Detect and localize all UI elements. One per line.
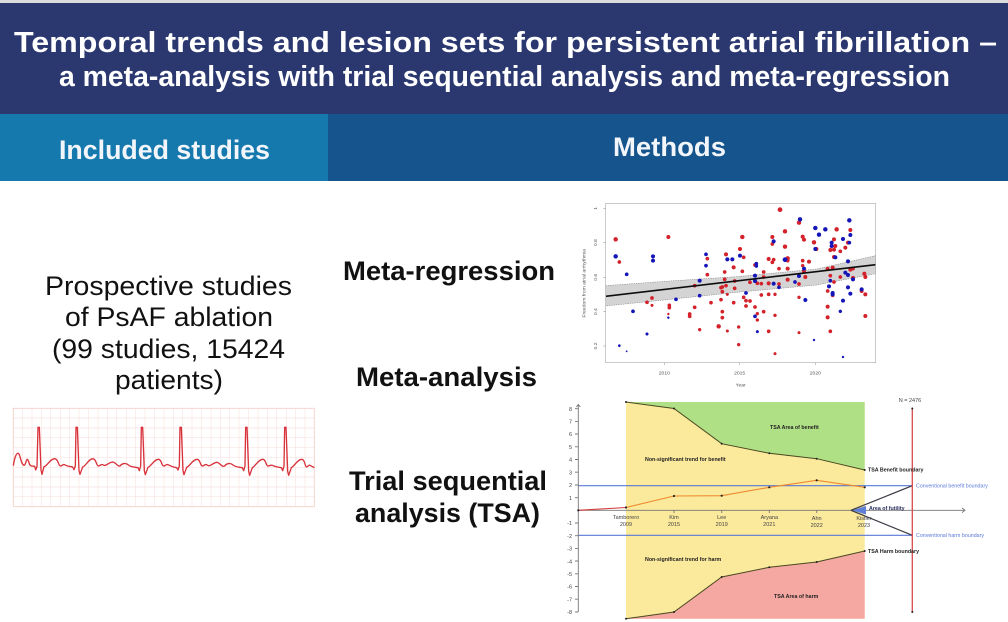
conventional boundary labels: [916, 484, 988, 539]
heading: included studies: Included studies: [59, 135, 270, 165]
axes labels: [582, 207, 821, 388]
study labels: Ahn: [812, 516, 822, 522]
y-axis tick labels: 1: [569, 496, 572, 502]
region labels: TSA Benefit boundary: [868, 468, 923, 474]
conventional boundaries: [578, 486, 912, 535]
study labels: 2019: [716, 522, 728, 528]
study labels: Kistler: [856, 516, 872, 522]
heading: included studies: [0, 114, 328, 181]
y-axis tick labels: 2: [569, 483, 572, 489]
y-axis tick labels: [567, 407, 572, 616]
region labels: Non-significant trend for harm: [645, 557, 722, 563]
N label: N = 2476: [899, 398, 921, 404]
axes labels: 0.6: [593, 274, 599, 281]
axes labels: Freedom from atrial arrhythmia: [582, 249, 588, 318]
text: included studies description: [45, 271, 292, 395]
y-axis tick labels: 8: [569, 407, 572, 413]
icon: ECG strip: [13, 408, 314, 507]
study labels: Kim: [669, 515, 679, 521]
y-axis tick labels: -5: [567, 572, 572, 578]
conventional boundary labels: Conventional harm boundary: [916, 533, 984, 539]
y-axis tick labels: -4: [567, 559, 572, 565]
chart: meta-regression scatter plot: [582, 203, 876, 388]
y-axis tick labels: 5: [569, 445, 572, 451]
chart: trial sequential analysis: [567, 398, 988, 620]
text: included studies description: Prospective studies: [45, 271, 292, 301]
axes labels: Year: [736, 382, 746, 388]
heading: methods: [328, 114, 1008, 181]
y-axis tick labels: -1: [567, 521, 572, 527]
title banner: Temporal trends and lesion sets for persistent atrial fibrillation –: [14, 27, 997, 59]
area: non-significant (yellow): [626, 402, 865, 619]
confidence band: [606, 256, 876, 306]
axes: [575, 404, 965, 612]
study labels: Tamborero: [613, 515, 639, 521]
axes labels: 2010: [659, 370, 670, 376]
region labels: TSA Area of harm: [774, 594, 819, 600]
label: trial sequential analysis: [349, 466, 547, 528]
axes labels: 0.4: [593, 308, 599, 315]
area: TSA harm (red): [626, 551, 865, 619]
region labels: Non-significant trend for benefit: [645, 457, 726, 463]
y-axis tick labels: -2: [567, 534, 572, 540]
axes labels: 2020: [810, 370, 821, 376]
study labels: 2021: [763, 522, 775, 528]
heading: methods: Methods: [613, 132, 726, 162]
y-axis tick labels: 4: [569, 458, 572, 464]
study labels: [613, 515, 872, 529]
y-axis tick labels: 6: [569, 432, 572, 438]
study labels: Lee: [717, 515, 726, 521]
axes labels: 2015: [734, 370, 745, 376]
text: included studies description: patients): [115, 365, 223, 395]
axes labels: 1: [593, 207, 599, 210]
study labels: 2015: [668, 522, 680, 528]
Z-curve: [578, 508, 626, 510]
study labels: Aryana: [761, 515, 779, 521]
study labels: 2023: [858, 523, 870, 529]
region labels: Area of futility: [869, 506, 905, 512]
y-axis tick labels: -3: [567, 547, 572, 553]
study labels: 2022: [811, 523, 823, 529]
area of futility: [852, 506, 866, 514]
text: included studies description: of PsAF ablation: [65, 302, 273, 332]
y-axis tick labels: 7: [569, 420, 572, 426]
label: trial sequential analysis: analysis (TSA): [355, 498, 540, 528]
blue study points: [614, 217, 863, 358]
red study points: [614, 207, 867, 355]
area: TSA benefit (green): [626, 402, 865, 470]
conventional boundary labels: Conventional benefit boundary: [916, 484, 988, 490]
study labels: 2009: [620, 522, 632, 528]
regression line: [606, 265, 876, 296]
y-axis tick labels: 3: [569, 470, 572, 476]
axes labels: 0.2: [593, 342, 599, 349]
required information size line: [911, 408, 913, 612]
text: included studies description: (99 studies, 15424: [52, 334, 285, 364]
axes labels: 0.8: [593, 239, 599, 246]
title banner: a meta-analysis with trial sequential analysis and meta-regression: [59, 61, 950, 93]
title banner: [0, 3, 1008, 114]
region labels: TSA Harm boundary: [868, 549, 919, 555]
y-axis tick labels: -7: [567, 597, 572, 603]
region labels: TSA Area of benefit: [770, 425, 819, 431]
label: trial sequential analysis: Trial sequential: [349, 466, 547, 496]
y-axis tick labels: -6: [567, 585, 572, 591]
TSA boundaries: [626, 402, 865, 619]
label: meta-analysis: Meta-analysis: [356, 362, 537, 392]
label: meta-regression: Meta-regression: [343, 256, 555, 286]
y-axis tick labels: -8: [567, 610, 572, 616]
region labels: [645, 425, 923, 600]
